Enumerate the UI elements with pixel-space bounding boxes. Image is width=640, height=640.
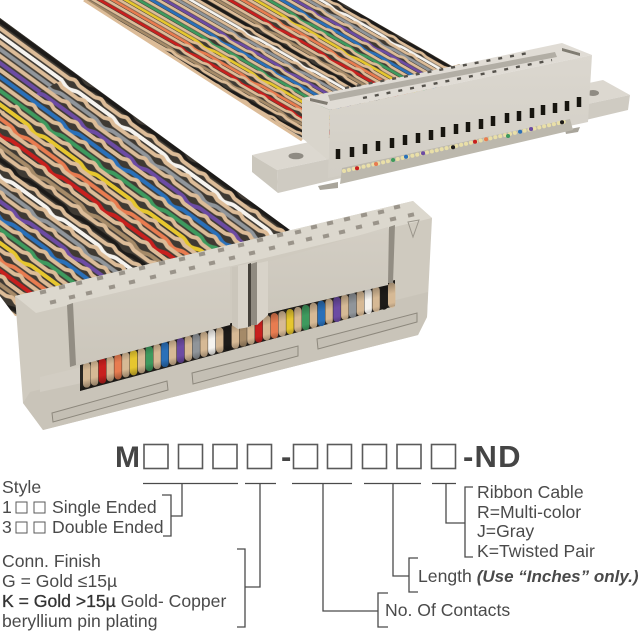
cover panel left: [73, 266, 230, 367]
text: style options: [2, 477, 164, 537]
text: ribbon cable options: [477, 482, 595, 561]
text: style options: Style: [2, 477, 41, 497]
text: connector finish: beryllium pin plating: [2, 611, 158, 631]
contact slots: [338, 97, 579, 159]
text: length: Length (Use “Inches” only.): [418, 566, 639, 586]
contact holes: [40, 206, 414, 303]
part number heading: -: [281, 439, 291, 474]
orientation triangle: [408, 220, 419, 237]
cable: rear ribbon: [84, 0, 460, 140]
text: style options: 3: [2, 517, 12, 537]
text: style options: Single Ended: [52, 497, 157, 517]
cover panel right: [268, 227, 388, 313]
flange: [252, 80, 630, 193]
text: number of contacts: No. Of Contacts: [385, 600, 510, 620]
connector: rear double-ended header: [252, 43, 630, 193]
text: style options: 1: [2, 497, 12, 517]
leader lines: [143, 484, 473, 627]
connector: front IDC socket: [15, 201, 432, 430]
wire ends: [87, 286, 392, 384]
cable: front ribbon: [0, 18, 290, 320]
body: [302, 43, 592, 178]
part number heading: -ND: [463, 439, 522, 474]
lower shell: [23, 292, 428, 430]
text: ribbon cable options: Ribbon Cable: [477, 482, 584, 502]
text: connector finish: [2, 551, 226, 631]
top face: [15, 201, 432, 313]
part number heading: [115, 439, 522, 474]
text: connector finish: Conn. Finish: [2, 551, 101, 571]
text: ribbon cable options: K=Twisted Pair: [477, 541, 595, 561]
pin row: [340, 119, 573, 184]
part number heading: M: [115, 441, 140, 474]
recessed labels: [52, 313, 417, 422]
text: connector finish: G = Gold ≤15µ: [2, 571, 117, 591]
wire window: [80, 280, 395, 391]
text: connector finish: K = Gold >15µ Gold- Copper: [2, 591, 226, 611]
body: [15, 201, 432, 430]
ledge band: [40, 367, 82, 392]
centre tab: [232, 261, 268, 329]
latch slots: [67, 225, 395, 367]
text: ribbon cable options: R=Multi-color: [477, 502, 581, 522]
text: style options: Double Ended: [52, 517, 164, 537]
text: ribbon cable options: J=Gray: [477, 521, 534, 541]
